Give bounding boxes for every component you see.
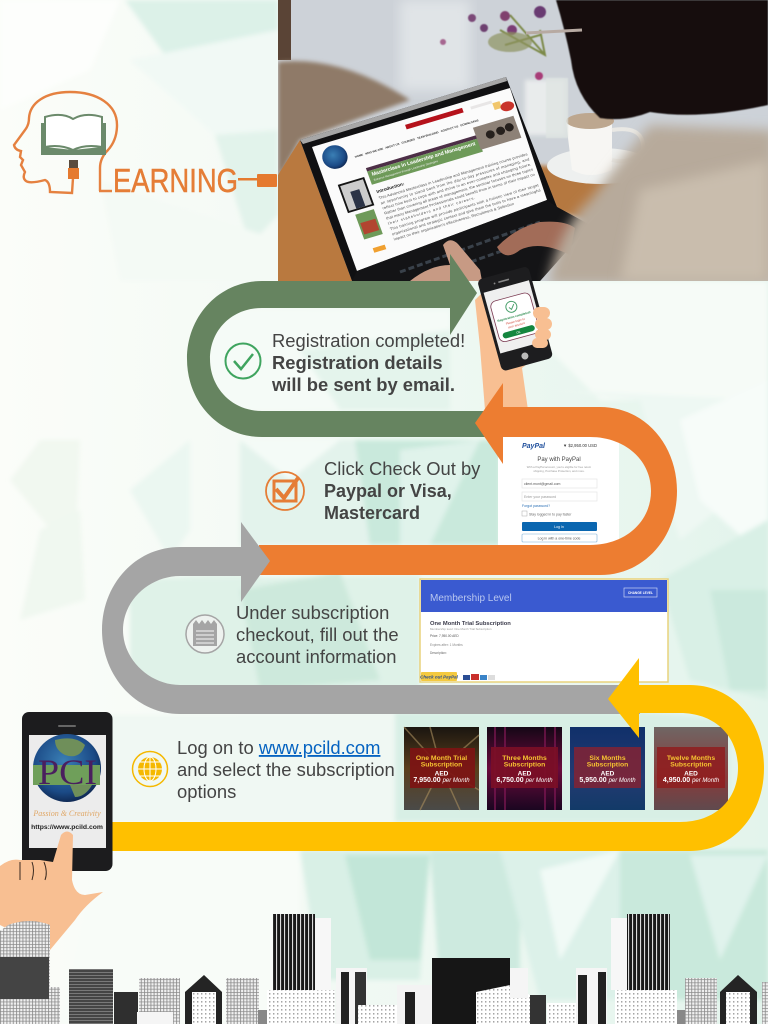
card: three months: 6,750.00 per Month	[496, 777, 553, 784]
city skyline	[0, 914, 768, 1024]
card: one month trial: AED	[435, 770, 449, 778]
card: twelve months: Subscription	[670, 762, 712, 768]
hands on keyboard	[410, 222, 575, 281]
laptop screen web page: This training program will provide participants with a holistic view of their target	[389, 183, 540, 231]
laptop screen web page: This Advanced Masterclass in Leadership and Management training course provides	[378, 152, 528, 200]
card: three months	[487, 727, 562, 810]
card: one month trial: Subscription	[421, 762, 462, 768]
phone showing registration completed: Registration completed!	[497, 310, 531, 323]
open book	[41, 115, 106, 155]
card: six months	[570, 727, 645, 810]
card: three months: Three Months	[502, 755, 547, 762]
globe logo: PCI	[38, 752, 97, 792]
membership level panel: Check out PayPal	[420, 674, 459, 680]
tall tower right	[611, 918, 627, 990]
hand tapping phone	[0, 832, 103, 950]
laptop screen web page: their stakeholders and their careers.	[387, 196, 476, 226]
card: six months: Six Months	[589, 755, 626, 762]
green loop arrow	[187, 254, 500, 437]
hand holding phone	[475, 280, 545, 410]
USB plug	[68, 160, 79, 179]
laptop screen web page: reflect how best to cope with and thrive in an ever-complex and changing future.	[382, 163, 532, 210]
laptop screen web page: that many Management Professionals could benefit from in terms of their impact on	[386, 173, 535, 221]
phone showing registration completed	[477, 266, 553, 372]
membership level panel: Membership level: One Month Trial Subscription	[430, 627, 492, 631]
step text: check out: Click Check Out by	[324, 458, 481, 479]
PayPal login panel: Forgot password?	[522, 504, 550, 508]
laptop	[300, 77, 590, 281]
card: six months: 5,950.00 per Month	[579, 777, 636, 784]
membership level panel: Expires after: 1 Months	[430, 643, 463, 647]
laptop screen web page: an opportunity to stand back from the day-to-day pressures of managing, and	[380, 157, 530, 205]
fingers holding phone	[532, 307, 552, 348]
step text: subscription checkout: account information	[236, 646, 396, 667]
icon: yellow globe	[132, 752, 168, 786]
phone with PCI website: https://www.pcild.com	[31, 824, 103, 831]
PayPal login panel: shipping, Purchase Protection, and more.	[533, 469, 585, 473]
PayPal login panel: Pay with PayPal	[537, 457, 581, 463]
woman: sweater, hair	[526, 0, 768, 285]
laptop screen web page: organizational and strategic context and give them the tools to have a meaningful	[391, 188, 541, 236]
card: three months: Subscription	[504, 762, 545, 768]
step text: log on: www.pcild.com	[258, 737, 380, 758]
yellow loop arrow	[100, 658, 764, 851]
orange loop arrow	[259, 383, 677, 575]
step text: subscription checkout: Under subscription	[236, 602, 389, 623]
card: twelve months: AED	[684, 770, 698, 778]
membership level panel	[420, 579, 668, 682]
laptop screen web page	[322, 100, 540, 253]
PayPal login panel: Enter your password	[524, 495, 556, 499]
left tower	[0, 921, 50, 1024]
card: twelve months	[654, 727, 728, 810]
card: three months: AED	[518, 770, 532, 778]
step text: subscription checkout: checkout, fill out the	[236, 624, 399, 645]
phone with PCI website: Passion & Creativity	[32, 809, 101, 818]
laptop screen web page: Rather than covering all areas of management, the seminar focuses on three topics	[384, 168, 534, 216]
tall tower left	[273, 914, 315, 990]
laptop screen web page: Enhance Management through Leadership Strategies	[373, 159, 439, 182]
phone with PCI website	[22, 712, 112, 871]
step text: registration completed: Registration details	[272, 352, 443, 373]
step text: log on: options	[177, 781, 236, 802]
photo: woman using laptop	[278, 0, 768, 285]
card: twelve months: 4,950.00 per Month	[663, 777, 720, 784]
flowers in vase	[440, 6, 568, 138]
wordmark: EARNING	[113, 162, 238, 199]
icon: green check circle	[226, 344, 260, 378]
step text: check out: Mastercard	[324, 503, 420, 523]
head outline and cable	[14, 92, 117, 193]
PayPal login panel: ▼ $2,950.00 USD	[563, 443, 597, 448]
central black tower	[432, 958, 510, 1024]
laptop screen web page: impact on their organization's effectiveness, Recruitment & Selection	[393, 202, 515, 241]
coffee cup and saucer	[547, 113, 653, 184]
membership level panel: One Month Trial Subscription	[430, 621, 511, 627]
membership level panel: CHANGE LEVEL	[628, 591, 653, 595]
PayPal login panel: client.mont@gmail.com	[524, 482, 561, 486]
card: six months: Subscription	[587, 762, 628, 768]
photo background	[278, 0, 768, 281]
globe logo	[33, 734, 101, 802]
step text: log on: and select the subscription	[177, 759, 395, 780]
laptop screen web page: Masterclass in Leadership and Management	[371, 141, 477, 178]
step text: log on: Log on to	[177, 737, 259, 758]
phone showing registration completed: OK	[516, 330, 521, 335]
PayPal login panel: Log In	[554, 525, 564, 529]
icon: gray notepad	[186, 615, 224, 653]
card: one month trial: 7,950.00 per Month	[413, 777, 470, 784]
card: one month trial	[404, 727, 479, 810]
phone showing registration completed: your account	[508, 321, 525, 329]
step text: registration completed: will be sent by email.	[271, 374, 455, 395]
card: six months: AED	[601, 770, 615, 778]
PayPal login panel	[498, 437, 619, 546]
logo: head with book and LEARNING wordmark	[14, 92, 277, 199]
membership level panel: Membership Level	[430, 593, 512, 604]
card: twelve months: Twelve Months	[667, 755, 715, 762]
icon: orange checkbox	[266, 472, 304, 510]
card: one month trial: One Month Trial	[416, 755, 467, 762]
PayPal login panel: With a PayPal account, you're eligible for free return	[527, 465, 592, 469]
laptop screen web page: HOME WHO WE ARE ABOUT US COURSES TEAM BUILDING CONTACT US DOWNLOADS	[354, 118, 479, 159]
membership level panel: Price: 7,950.00 AED	[430, 634, 459, 638]
PayPal login panel: Stay logged in to pay faster	[529, 512, 572, 516]
phone showing registration completed: Please login to	[505, 317, 526, 326]
PayPal login panel: Log in with a one-time code	[538, 536, 580, 540]
step text: check out: Paypal or Visa,	[324, 481, 452, 501]
step text: registration completed: Registration completed!	[272, 330, 465, 351]
PayPal login panel: PayPal	[522, 443, 546, 450]
laptop screen web page: Introduction:	[376, 181, 405, 194]
gray loop arrow	[102, 522, 640, 714]
connector plug	[238, 174, 277, 187]
membership level panel: Description:	[430, 651, 447, 655]
subscription cards	[404, 727, 728, 810]
